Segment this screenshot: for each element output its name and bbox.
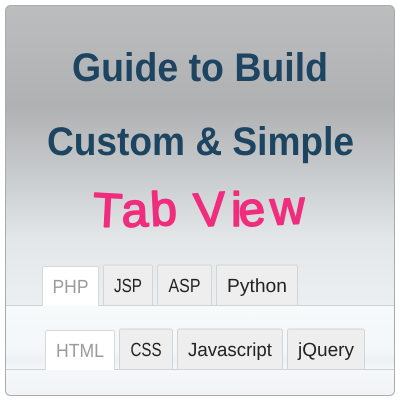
tab: JSP bbox=[104, 265, 152, 306]
tab: Javascript: Javascript bbox=[188, 340, 273, 361]
tab: PHP active bbox=[42, 266, 98, 306]
tabs: first row bbox=[42, 265, 298, 306]
tab: HTML active bbox=[46, 330, 114, 370]
tab: ASP bbox=[158, 265, 212, 306]
tab: PHP active: PHP bbox=[52, 277, 88, 298]
divider: lower tabs baseline bbox=[6, 369, 394, 370]
tab: CSS bbox=[120, 329, 172, 370]
title: Tab View: Tab View bbox=[91, 181, 307, 239]
tab: Python bbox=[216, 265, 298, 306]
tab: Python: Python bbox=[227, 276, 287, 297]
panel: lower tab area bbox=[6, 306, 394, 395]
title: Guide to Build: Guide to Build bbox=[72, 46, 328, 90]
title: Custom & Simple: Custom & Simple bbox=[47, 120, 354, 164]
tab: JSP: JSP bbox=[114, 276, 142, 297]
tab: jQuery: jQuery bbox=[297, 340, 354, 361]
tabs: second row bbox=[46, 329, 364, 370]
tab: jQuery bbox=[288, 329, 364, 370]
tab: HTML active: HTML bbox=[56, 341, 104, 362]
tab: Javascript bbox=[178, 329, 282, 370]
tab: ASP: ASP bbox=[168, 276, 200, 297]
divider: upper tabs baseline bbox=[6, 305, 394, 306]
tab: CSS: CSS bbox=[130, 340, 162, 361]
